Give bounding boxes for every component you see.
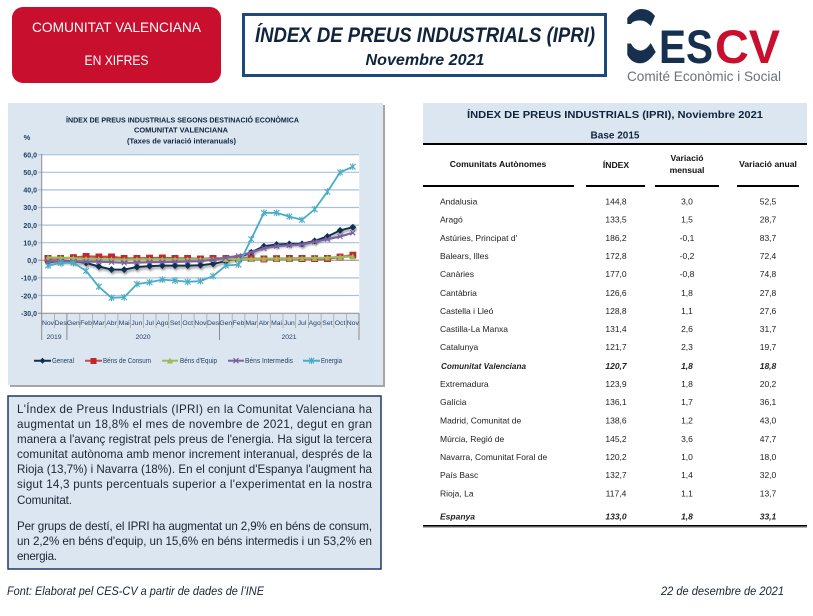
column headings: [423, 153, 799, 187]
table rows: Galícia: [440, 397, 467, 407]
column headings: ÍNDEX: [603, 160, 629, 170]
x axis labels: Mar: [93, 320, 105, 327]
column headings: Variació: [671, 153, 703, 163]
table header band: [423, 103, 807, 145]
badge: Comunitat Valenciana en xifres: COMUNITAT VALENCIANA: [32, 19, 202, 35]
logo: CES CV: ES: [659, 20, 713, 73]
x axis labels: Abr: [259, 320, 270, 327]
y axis labels: -30,0: [21, 311, 37, 318]
text panel: commentary: L'Índex de Preus Industrials (IPRI) en la Comunitat Valenciana ha: [17, 403, 373, 416]
table rows: 123,9: [605, 379, 627, 389]
plot area: [42, 154, 359, 313]
table rows: 120,2: [605, 452, 627, 462]
x axis labels: Set: [170, 320, 180, 327]
table rows: 2,3: [681, 342, 693, 352]
x axis labels: Nov: [347, 320, 359, 327]
x axis labels: Ago: [156, 320, 169, 327]
table rows: 47,7: [760, 434, 777, 444]
text panel: commentary: Comunitat.: [17, 494, 72, 507]
table rows: Navarra, Comunitat Foral de: [440, 452, 548, 462]
table rows: 1,4: [681, 470, 693, 480]
series: Béns Intermedis: [48, 233, 353, 263]
table rows: 138,6: [605, 416, 627, 426]
table rows: 1,5: [681, 214, 693, 224]
panel: line chart: [8, 103, 385, 387]
table rows: 1,8: [681, 512, 693, 522]
x axis labels: Jun: [284, 320, 295, 327]
legend: Energia: [321, 358, 342, 365]
table rows: 1,1: [681, 488, 693, 498]
table rows: -0,1: [680, 233, 695, 243]
table rows: -0,8: [680, 269, 695, 279]
series: Energia: [48, 167, 353, 298]
table rows: 133,5: [605, 214, 627, 224]
legend: Béns d'Equip: [180, 358, 217, 365]
table rows: 131,4: [605, 324, 627, 334]
x axis labels: 2019: [46, 334, 62, 341]
text panel: commentary: sigut 14,3 punts percentuals superior a l'experimentat en la nostra: [17, 478, 373, 491]
table rows: Andalusia: [440, 196, 478, 206]
table rows: Aragó: [440, 214, 463, 224]
table rows: 74,8: [760, 269, 777, 279]
table header band: ÍNDEX DE PREUS INDUSTRIALS (IPRI), Noviembre 2021: [467, 108, 763, 121]
y axis labels: [21, 133, 37, 318]
title box: Novembre 2021: [366, 52, 485, 69]
table rows: 145,2: [605, 434, 627, 444]
title box: ÍNDEX DE PREUS INDUSTRIALS (IPRI): [255, 24, 595, 47]
source note: Font: Elaborat pel CES-CV a partir de dades de l’INE: [7, 586, 264, 598]
table rows: Castella i Lleó: [440, 306, 494, 316]
x axis labels: Nov: [194, 320, 207, 327]
table rows: Rioja, La: [440, 488, 474, 498]
logo: CES CV: [627, 9, 781, 84]
table rows: 136,1: [605, 397, 627, 407]
text panel: commentary: [8, 396, 381, 569]
table rows: Astúries, Principat d': [440, 233, 518, 243]
y axis labels: -20,0: [21, 294, 37, 300]
y axis labels: 10,0: [23, 240, 37, 248]
x axis labels: Jul: [145, 320, 154, 327]
table rows: Extremadura: [440, 379, 489, 389]
table rows: 1,2: [681, 416, 693, 426]
x axis labels: Des: [55, 320, 67, 327]
table rows: 31,7: [760, 324, 777, 334]
table rows: 1,0: [681, 452, 693, 462]
table rows: Cantàbria: [440, 288, 477, 298]
table rows: 172,8: [605, 251, 627, 261]
x axis labels: Mai: [271, 320, 283, 327]
y axis labels: 20,0: [23, 223, 37, 230]
column headings: Variació anual: [739, 159, 797, 169]
table rows: 186,2: [605, 233, 627, 243]
text panel: commentary: Rioja (13,7%) i Navarra (18%). En el conjunt d'Espanya l'augment ha: [17, 463, 373, 476]
title box: [244, 14, 606, 76]
table rows: 144,8: [605, 196, 627, 206]
series: General: [48, 227, 353, 270]
chart title: (Taxes de variació interanuals): [127, 136, 237, 146]
table rows: Madrid, Comunitat de: [440, 416, 522, 426]
y axis labels: 30,0: [23, 205, 37, 212]
x axis labels: [42, 320, 359, 341]
text panel: commentary: Per grups de destí, el IPRI ha augmentat un 2,9% en béns de consum,: [17, 520, 372, 533]
table rows: 133,0: [605, 512, 627, 522]
logo: CES CV: Comité Econòmic i Social: [627, 68, 781, 84]
text panel: commentary: manera a l'avanç registrat pels preus de l'energia. Ha sigut la tercera: [17, 433, 373, 446]
x axis labels: 2021: [281, 334, 297, 341]
chart title: ÍNDEX DE PREUS INDUSTRIALS SEGONS DESTINACIÓ ECONÒMICA: [66, 116, 300, 124]
y axis labels: 40,0: [23, 188, 37, 194]
text panel: commentary: augmentat un 18,8% el mes de novembre de 2021, degut en gran: [17, 418, 372, 431]
x axis labels: Set: [322, 320, 333, 327]
table rows: 36,1: [760, 397, 777, 407]
x axis labels: Oct: [182, 320, 193, 327]
x axis labels: Mar: [245, 320, 258, 327]
x axis labels: 2020: [135, 334, 151, 341]
panel: data table: [423, 103, 807, 528]
table rows: Comunitat Valenciana: [441, 361, 526, 371]
y axis labels: -10,0: [21, 276, 37, 282]
x axis labels: Feb: [233, 320, 245, 327]
x axis labels: Gen: [219, 320, 232, 327]
y axis labels: %: [24, 133, 31, 142]
table rows: 27,6: [760, 306, 777, 316]
table rows: 120,7: [605, 361, 628, 371]
table rows: 27,8: [760, 288, 777, 298]
column headings: mensual: [670, 165, 704, 175]
table rows: Castilla-La Manxa: [440, 324, 508, 334]
table rows: 83,7: [760, 233, 777, 243]
text panel: commentary: comunitat autònoma amb menor increment interanual, després de la: [17, 448, 373, 461]
table rows: 18,8: [760, 361, 777, 371]
legend: [34, 358, 342, 365]
table rows: 1,8: [681, 361, 693, 371]
table rows: Múrcia, Regió de: [440, 434, 505, 444]
y axis labels: 60,0: [23, 152, 37, 160]
x axis labels: Abr: [106, 320, 118, 327]
chart title: COMUNITAT VALENCIANA: [134, 126, 229, 134]
table rows: 13,7: [760, 488, 777, 498]
table rows: País Basc: [440, 470, 479, 480]
x axis labels: Jul: [298, 320, 307, 327]
table rows: 28,7: [760, 214, 777, 224]
chart title: [66, 116, 300, 146]
text panel: commentary: energia.: [17, 550, 57, 563]
table rows: 32,0: [760, 470, 777, 480]
x axis labels: Gen: [67, 320, 80, 327]
x axis labels: Mai: [119, 320, 130, 327]
x axis labels: Ago: [309, 320, 321, 327]
table rows: 19,7: [760, 342, 777, 352]
legend: General: [52, 358, 74, 365]
logo: CES CV: CV: [715, 20, 781, 73]
date: 22 de desembre de 2021: [660, 586, 784, 598]
table rows: -0,2: [680, 251, 695, 261]
table rows: 52,5: [760, 196, 777, 206]
series: Béns de Consum: [48, 255, 353, 259]
x axis labels: Feb: [80, 320, 92, 327]
x axis labels: Nov: [42, 320, 55, 327]
legend: Béns Intermedis: [245, 358, 293, 365]
table rows: 1,7: [681, 397, 693, 407]
table rows: 20,2: [760, 379, 777, 389]
table header band: Base 2015: [591, 130, 640, 142]
table rows: 3,6: [681, 434, 693, 444]
x axis labels: Oct: [335, 320, 345, 327]
table rows: Espanya: [440, 512, 475, 522]
y axis labels: 50,0: [23, 170, 37, 177]
table rows: 117,4: [606, 488, 627, 498]
column headings: Comunitats Autònomes: [450, 159, 547, 169]
badge: Comunitat Valenciana en xifres: EN XIFRES: [84, 52, 148, 68]
table rows: 1,8: [681, 379, 693, 389]
badge: Comunitat Valenciana en xifres: [12, 7, 221, 83]
table rows: 126,6: [605, 288, 627, 298]
table rows: 3,0: [681, 196, 693, 206]
table rows: 43,0: [760, 416, 777, 426]
table rows: 128,8: [605, 306, 627, 316]
y axis labels: 0,0: [27, 258, 37, 265]
table rows: 1,1: [681, 306, 693, 316]
table rows: Catalunya: [440, 342, 479, 352]
table rows: 2,6: [681, 324, 693, 334]
table rows: Balears, Illes: [440, 251, 489, 261]
table rows: 18,0: [760, 452, 777, 462]
table rows: Canàries: [440, 269, 474, 279]
table rows: 33,1: [760, 512, 777, 522]
legend: Béns de Consum: [103, 358, 151, 365]
series: Béns d'Equip: [48, 256, 353, 260]
table rows: 72,4: [760, 251, 777, 261]
table rows: 132,7: [605, 470, 627, 480]
table rows: [440, 196, 777, 522]
table rows: 1,8: [681, 288, 693, 298]
x axis labels: Des: [207, 320, 220, 327]
text panel: commentary: un 2,2% en béns d'equip, un 15,6% en béns intermedis i un 53,2% en: [17, 535, 372, 548]
table rows: 121,7: [605, 342, 627, 352]
x axis labels: Jun: [131, 320, 143, 327]
table rows: 177,0: [605, 269, 627, 279]
